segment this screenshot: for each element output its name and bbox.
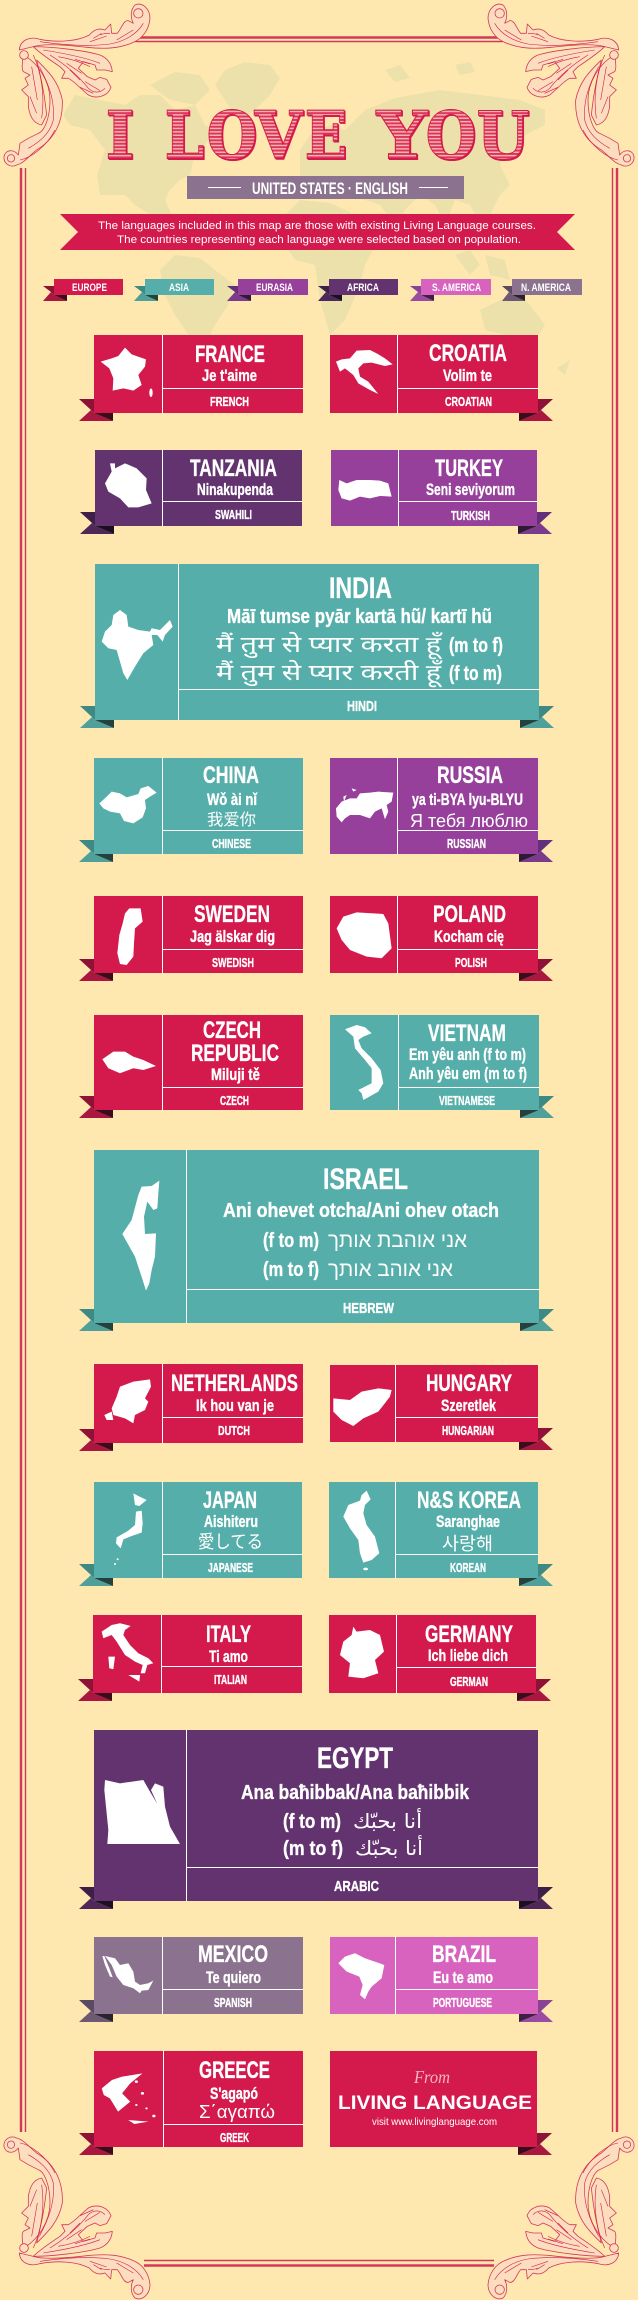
- intro banner: [60, 214, 575, 250]
- card: Egypt: (m to f): [283, 1838, 343, 1860]
- card: Hungary: [330, 1365, 553, 1450]
- card: Brazil: PORTUGUESE: [433, 1996, 492, 2010]
- icon: Brazil map: [338, 1953, 384, 1999]
- card: Israel: HEBREW: [343, 1300, 395, 1317]
- title: L: [165, 98, 204, 174]
- title: V: [254, 98, 303, 174]
- card: Tanzania: [80, 450, 302, 534]
- card: Croatia: CROATIAN: [445, 395, 492, 409]
- card: Vietnam: [330, 1015, 554, 1118]
- card: Japan: Aishiteru: [204, 1513, 258, 1531]
- icon: Greece map: [102, 2073, 155, 2124]
- card: Hungary: HUNGARY: [426, 1370, 512, 1397]
- card: Japan: JAPANESE: [208, 1561, 253, 1575]
- card: Greece: Σ΄αγαπώ: [199, 2102, 275, 2122]
- icon: Japan map: [114, 1493, 147, 1565]
- card: Vietnam: Anh yêu em (m to f): [409, 1065, 527, 1083]
- card: Mexico: MEXICO: [198, 1941, 268, 1968]
- icon: Sweden map: [117, 908, 143, 965]
- legend: Eurasia: [227, 279, 308, 301]
- legend: Asia: ASIA: [169, 282, 189, 294]
- legend: North America: N. AMERICA: [521, 282, 571, 294]
- card: Egypt: ARABIC: [334, 1878, 379, 1895]
- icon: Egypt map: [104, 1780, 180, 1844]
- card: Czech Republic: REPUBLIC: [191, 1040, 279, 1067]
- title: I: [106, 98, 134, 174]
- card: Czech Republic: CZECH: [203, 1017, 261, 1044]
- icon: Czech Republic map: [102, 1052, 156, 1073]
- card: India: [80, 564, 554, 728]
- card: Egypt: Ana baħibbak/Ana baħibbik: [241, 1782, 470, 1804]
- ornament: bottom right corner: [488, 2137, 634, 2299]
- card: Japan: 愛してる: [198, 1528, 263, 1554]
- card: North and South Korea: N&S KOREA: [417, 1487, 521, 1514]
- card: Brazil: BRAZIL: [432, 1941, 496, 1968]
- card: Russia: [330, 758, 553, 862]
- title: O: [207, 98, 257, 174]
- legend: Asia: [134, 279, 214, 301]
- card: Poland: POLAND: [433, 901, 506, 928]
- icon: Korea map: [343, 1491, 379, 1570]
- card: Turkey: TURKEY: [435, 455, 503, 482]
- card: Vietnam: VIETNAM: [428, 1020, 506, 1047]
- card: Tanzania: TANZANIA: [190, 455, 277, 482]
- card: Israel: ISRAEL: [323, 1163, 408, 1196]
- card: Living Language credit: LIVING LANGUAGE: [338, 2093, 532, 2114]
- card: Mexico: SPANISH: [214, 1996, 252, 2010]
- card: Israel: אני אוהב אותך: [328, 1258, 453, 1281]
- card: India: मैं तुम से प्यार करती हूँ: [216, 659, 443, 689]
- subtitle bar: UNITED STATES · ENGLISH: [252, 179, 408, 198]
- card: India: Māī tumse pyār kartā hũ/ kartī hũ: [227, 606, 492, 628]
- card: Sweden: [79, 896, 303, 981]
- card: Tanzania: Ninakupenda: [197, 481, 274, 499]
- card: China: 我爱你: [207, 806, 256, 830]
- card: Mexico: [79, 1937, 303, 2022]
- icon: France map: [101, 348, 153, 397]
- legend: [43, 279, 582, 301]
- intro banner: The countries representing each language were selected based on population.: [117, 234, 521, 246]
- card: Turkey: Seni seviyorum: [426, 481, 515, 499]
- card: Egypt: (f to m): [283, 1811, 341, 1833]
- icon: Netherlands map: [104, 1379, 151, 1423]
- card: Egypt: [79, 1730, 553, 1909]
- card: Netherlands: [79, 1364, 303, 1451]
- ornament: bottom left corner: [4, 2137, 150, 2299]
- legend: Europe: [43, 279, 123, 301]
- card: Israel: (f to m): [263, 1230, 319, 1252]
- card: Brazil: [330, 1937, 553, 2022]
- title: [106, 98, 529, 174]
- card: North and South Korea: Saranghae: [436, 1513, 500, 1531]
- card: Vietnam: VIETNAMESE: [439, 1094, 495, 1108]
- card: Hungary: Szeretlek: [441, 1397, 497, 1415]
- card: China: CHINESE: [212, 837, 251, 851]
- title: O: [426, 98, 476, 174]
- card: Egypt: EGYPT: [317, 1742, 393, 1775]
- card: Sweden: Jag älskar dig: [190, 928, 275, 946]
- card: Turkey: [331, 450, 552, 534]
- icon: India map: [102, 610, 173, 680]
- card: Living Language credit: [330, 2051, 552, 2155]
- card: Living Language credit: visit www.livinglanguage.com: [372, 2116, 497, 2128]
- icon: Italy map: [102, 1623, 153, 1682]
- card: India: मैं तुम से प्यार करता हूँ: [216, 631, 443, 661]
- subtitle bar: [187, 176, 464, 199]
- card: Mexico: Te quiero: [206, 1969, 261, 1987]
- card: Japan: JAPAN: [203, 1487, 257, 1514]
- card: Sweden: SWEDISH: [212, 956, 254, 970]
- card: France: FRANCE: [195, 341, 265, 368]
- legend: Eurasia: EURASIA: [256, 282, 293, 294]
- card: Israel: [79, 1150, 554, 1331]
- card: Netherlands: Ik hou van je: [196, 1397, 274, 1415]
- card: Greece: [79, 2051, 303, 2155]
- card: Russia: RUSSIAN: [447, 837, 486, 851]
- card: Italy: ITALY: [206, 1621, 251, 1648]
- card: Croatia: Volim te: [443, 367, 492, 385]
- icon: China map: [99, 786, 157, 823]
- icon: Turkey map: [338, 480, 392, 501]
- card: Poland: [330, 896, 553, 981]
- legend: Europe: EUROPE: [72, 282, 107, 294]
- card: Croatia: [330, 335, 553, 421]
- card: Sweden: SWEDEN: [194, 901, 270, 928]
- icon: Germany map: [340, 1627, 384, 1678]
- card: North and South Korea: [329, 1482, 553, 1586]
- card: India: INDIA: [329, 572, 392, 605]
- card: Egypt: أنا بحبّك: [353, 1808, 422, 1833]
- card: Egypt: أنا بحبّك: [355, 1835, 423, 1860]
- card: Brazil: Eu te amo: [433, 1969, 493, 1987]
- legend: Africa: AFRICA: [347, 282, 379, 294]
- icon: Poland map: [337, 912, 392, 958]
- card: India: HINDI: [347, 698, 377, 715]
- card: France: [79, 335, 303, 421]
- card: Poland: Kocham cię: [434, 928, 504, 946]
- card: Croatia: CROATIA: [429, 340, 507, 367]
- card: Italy: ITALIAN: [214, 1673, 247, 1687]
- icon: Russia map: [336, 788, 393, 822]
- card: France: FRENCH: [210, 395, 249, 409]
- card: Living Language credit: From: [413, 2067, 450, 2087]
- card: Vietnam: Em yêu anh (f to m): [409, 1046, 526, 1064]
- legend: Africa: [318, 279, 398, 301]
- card: Hungary: HUNGARIAN: [442, 1424, 494, 1438]
- card: China: [79, 758, 303, 862]
- card: China: Wǒ ài nǐ: [207, 791, 258, 809]
- card: Italy: [78, 1615, 302, 1701]
- card: North and South Korea: 사랑해: [442, 1530, 493, 1556]
- world map background: [63, 62, 570, 375]
- title: E: [305, 98, 347, 174]
- card: India: (m to f): [449, 635, 503, 657]
- card: Netherlands: DUTCH: [218, 1424, 250, 1438]
- card: India: (f to m): [449, 663, 502, 685]
- icon: Tanzania map: [105, 463, 152, 507]
- icon: Croatia map: [336, 350, 393, 394]
- card: Greece: GREEK: [220, 2131, 249, 2145]
- ornament: top left corner: [4, 4, 150, 166]
- card: Turkey: TURKISH: [451, 509, 490, 523]
- card: Czech Republic: Miluji tě: [211, 1066, 260, 1084]
- card: Germany: GERMANY: [425, 1621, 513, 1648]
- card: Tanzania: SWAHILI: [215, 508, 252, 522]
- icon: Mexico map: [102, 1956, 153, 1993]
- card: Japan: [79, 1482, 302, 1586]
- legend: South America: S. AMERICA: [432, 282, 481, 294]
- card: Russia: Я тебя люблю: [410, 811, 528, 831]
- card: China: CHINA: [203, 762, 259, 789]
- card: Germany: GERMAN: [450, 1675, 488, 1689]
- card: France: Je t'aime: [202, 367, 257, 385]
- card: Czech Republic: [79, 1015, 303, 1118]
- icon: Hungary map: [333, 1388, 392, 1426]
- card: Russia: ya ti-BYA lyu-BLYU: [412, 791, 523, 809]
- card: Netherlands: NETHERLANDS: [171, 1370, 298, 1397]
- card: Poland: POLISH: [455, 956, 487, 970]
- icon: Israel map: [122, 1181, 159, 1291]
- card: Israel: אני אוהבת אותך: [328, 1229, 467, 1252]
- card: North and South Korea: KOREAN: [450, 1561, 486, 1575]
- legend: South America: [410, 279, 491, 301]
- card: Italy: Ti amo: [209, 1648, 248, 1666]
- intro banner: The languages included in this map are those with existing Living Language courses.: [98, 220, 536, 232]
- icon: Vietnam map: [345, 1025, 383, 1100]
- title: Y: [376, 98, 428, 174]
- ornament: top right corner: [488, 4, 634, 166]
- card: Greece: S'agapó: [210, 2085, 258, 2103]
- card: Germany: Ich liebe dich: [428, 1647, 508, 1665]
- card: Czech Republic: CZECH: [220, 1094, 249, 1108]
- legend: North America: [502, 279, 582, 301]
- card: Greece: GREECE: [199, 2057, 270, 2084]
- card: Israel: Ani ohevet otcha/Ani ohev otach: [223, 1200, 499, 1222]
- card: Russia: RUSSIA: [437, 762, 503, 789]
- card: Israel: (m to f): [263, 1259, 319, 1281]
- card: Germany: [329, 1615, 551, 1701]
- title: U: [477, 98, 529, 174]
